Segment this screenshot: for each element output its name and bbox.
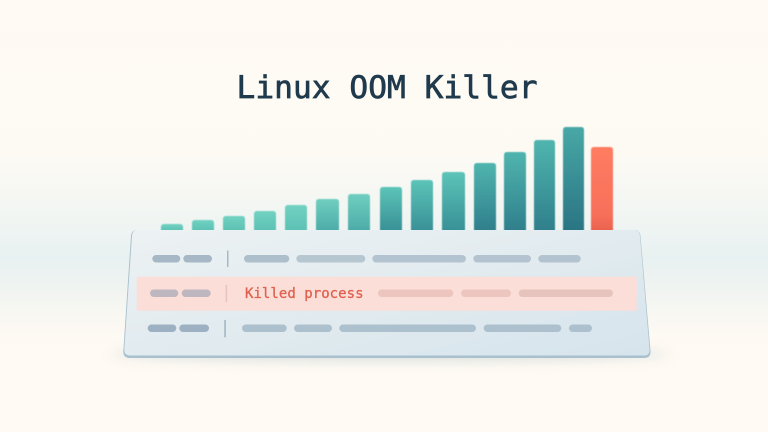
bar 4	[254, 211, 276, 231]
bar 13	[534, 140, 555, 231]
panel body	[123, 230, 651, 358]
highlight band	[137, 277, 637, 311]
highlighted log row: killed process	[137, 277, 637, 311]
log panel	[123, 230, 651, 358]
bar 3	[223, 216, 245, 231]
bar 11	[474, 163, 496, 231]
killed process label: Killed process	[245, 286, 364, 302]
log row 3	[148, 320, 592, 337]
bar 15: killed process	[591, 147, 613, 231]
bar 14	[563, 127, 584, 231]
bar 2	[192, 220, 214, 231]
bar 8	[380, 187, 402, 231]
title: Linux OOM Killer	[236, 70, 538, 106]
bar 6	[316, 199, 339, 231]
bar 7	[348, 194, 370, 231]
bar 12	[504, 152, 526, 231]
panel shadow	[110, 347, 670, 361]
log row 1	[152, 250, 581, 267]
bar 1	[161, 224, 183, 231]
bar 9	[411, 180, 433, 231]
bar 10	[442, 172, 465, 231]
bar chart: memory usage rising	[161, 127, 613, 231]
bar 5	[285, 205, 307, 231]
